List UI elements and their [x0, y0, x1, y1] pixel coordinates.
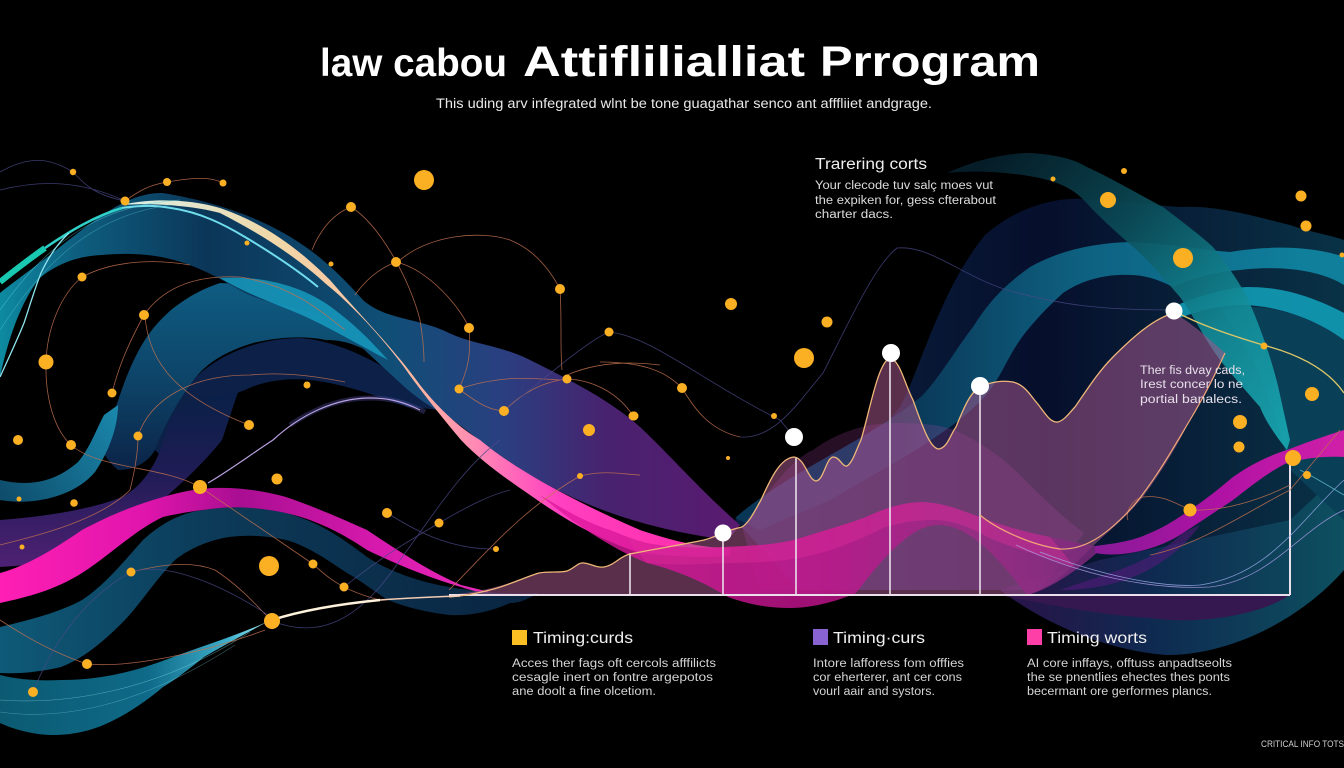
legend body purple: Intore lafforess fom offfies: [813, 658, 964, 670]
callout: chart annotation: Irest concer lo ne: [1140, 379, 1243, 391]
callout: chart annotation: portial banalecs.: [1140, 394, 1242, 406]
legend heading gold: Timing:curds: [533, 630, 633, 647]
legend body gold: cesagle inert on fontre argepotos: [512, 672, 713, 684]
swatch gold: [512, 630, 527, 645]
subtitle: This uding arv infegrated wlnt be tone guagathar senco ant afffliiet andgrage.: [436, 96, 932, 111]
legend: gold: [512, 630, 716, 698]
legend heading pink: Timing worts: [1047, 630, 1147, 647]
callout: top annotation: the expiken for, gess cfterabout: [815, 195, 997, 207]
cyan edge lines: [0, 200, 425, 714]
cyan highlight: [220, 278, 388, 360]
purple haze under right ribbon: [1060, 525, 1200, 590]
callout: top annotation: [815, 156, 997, 221]
bottom teal fan: [0, 621, 269, 735]
top wide band: [0, 193, 740, 540]
purple left band: [0, 392, 238, 567]
right axis drop: [1289, 465, 1291, 595]
pink ribbon highlight band: [625, 502, 1075, 567]
lower disc: [1000, 470, 1344, 655]
thin connecting lines: [0, 178, 1340, 665]
legend body purple: [813, 658, 964, 698]
central pink ribbon: [540, 495, 1103, 608]
legend: pink: [1027, 629, 1232, 698]
legend body purple: vourl aair and systors.: [813, 686, 935, 698]
navy arch background: [735, 199, 1344, 655]
callout heading: Trarering corts: [815, 156, 927, 173]
title: law cabou: [320, 42, 507, 85]
legend heading purple: Timing·curs: [833, 630, 925, 647]
dark teal band under pink: [0, 507, 539, 673]
teal sweep: [947, 153, 1290, 450]
callout body: Your clecode tuv salç moes vut: [815, 180, 994, 192]
callout: top annotation: charter dacs.: [815, 209, 893, 221]
purple under baseline: [1000, 595, 1290, 620]
callout: chart annotation: [1140, 365, 1245, 406]
swatch pink: [1027, 629, 1042, 645]
legend body pink: the se pnentlies ehectes thes ponts: [1027, 672, 1230, 684]
dark teal right field: [1222, 307, 1344, 520]
chart axis and markers: [449, 362, 1290, 595]
lighter hump inside chart: [742, 423, 1084, 590]
callout: chart annotation: Ther fis dvay cads,: [1140, 365, 1245, 377]
legend body pink: [1027, 658, 1232, 698]
navy inner band: [155, 338, 441, 470]
gold data dots: [13, 168, 1344, 697]
golden data line: [272, 311, 1344, 620]
legend body purple: cor eherterer, ant cer cons: [813, 672, 962, 684]
right pink ribbon: [1095, 430, 1344, 554]
legend body pink: becermant ore gerformes plancs.: [1027, 686, 1212, 698]
navy thin lines: [0, 160, 1344, 692]
white chart markers: [714, 302, 1182, 542]
title: Attiflilialliat: [523, 38, 805, 86]
left flowing ribbons: [0, 193, 740, 735]
legend body gold: [512, 658, 716, 698]
legend body pink: AI core inffays, offtuss anpadtseolts: [1027, 658, 1232, 670]
right flowing ribbons: [735, 153, 1344, 655]
title: Prrogram: [820, 38, 1040, 86]
legend: purple: [813, 629, 964, 698]
title: [320, 38, 1040, 86]
left teal arc: [0, 405, 118, 502]
baseline axis: [449, 594, 1290, 596]
legend body gold: ane doolt a fine olcetiom.: [512, 686, 656, 698]
pink ribbon: [0, 488, 490, 603]
marker stems: [630, 362, 980, 595]
second teal band: [102, 283, 441, 470]
area chart fill: [449, 313, 1225, 595]
teal arch: [735, 242, 1344, 530]
bright right arch: [1173, 287, 1344, 340]
legend body gold: Acces ther fags oft cercols afffilicts: [512, 658, 716, 670]
cream to pink streak: [122, 200, 730, 557]
swatch purple: [813, 629, 828, 645]
